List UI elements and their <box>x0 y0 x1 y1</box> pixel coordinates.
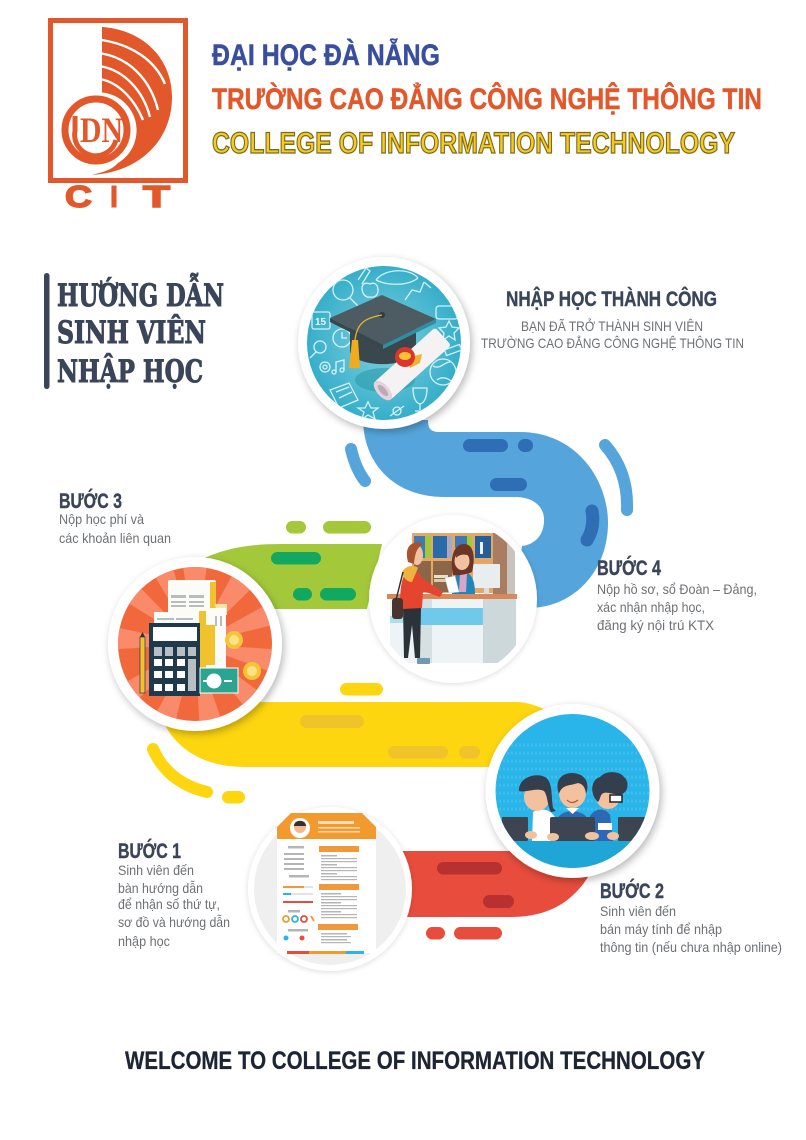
logo: CIT <box>50 20 186 214</box>
text: admission complete: BẠN ĐÃ TRỞ THÀNH SINH VIÊN <box>521 317 703 334</box>
path band: green <box>200 521 382 609</box>
text: step 3 <box>59 489 171 546</box>
university name: ĐẠI HỌC ĐÀ NẴNG <box>212 37 440 72</box>
text: admission complete: TRƯỜNG CAO ĐẲNG CÔNG NGHỆ THÔNG TIN <box>481 334 744 351</box>
text: step 1: sơ đồ và hướng dẫn <box>118 914 230 930</box>
path band: yellow <box>153 683 550 804</box>
text: step 3: các khoản liên quan <box>59 530 171 546</box>
text: step 1: BƯỚC 1 <box>118 839 181 863</box>
illustration: fee calculator circle <box>105 557 285 735</box>
text: step 4: xác nhận nhập học, <box>597 599 705 615</box>
text: admission complete <box>481 287 744 351</box>
illustration: graduation circle <box>298 257 470 429</box>
illustration: students at computers circle <box>486 704 660 878</box>
text: step 3: Nộp học phí và <box>59 511 144 527</box>
text: step 4 <box>597 556 757 633</box>
heading: guide for students: HƯỚNG DẪN <box>57 272 224 314</box>
illustration: registration desk circle <box>369 515 537 683</box>
text: step 4: Nộp hồ sơ, sổ Đoàn – Đảng, <box>597 581 757 597</box>
text: step 4: BƯỚC 4 <box>597 556 661 580</box>
text: step 3: BƯỚC 3 <box>59 489 122 513</box>
text: step 1: bàn hướng dẫn <box>118 880 203 896</box>
illustration: graduation circle: 15 <box>315 317 327 328</box>
path band: red <box>395 851 588 940</box>
logo: CIT: C <box>65 179 92 214</box>
text: step 1: nhập học <box>118 933 170 949</box>
text: step 2: bán máy tính để nhập <box>600 921 722 937</box>
heading: guide for students: SINH VIÊN <box>57 313 206 351</box>
text: step 4: đăng ký nội trú KTX <box>597 617 715 633</box>
text: step 2: Sinh viên đến <box>600 903 676 919</box>
logo: CIT: I <box>110 179 118 214</box>
text: step 2: BƯỚC 2 <box>600 879 664 903</box>
text: step 1: Sinh viên đến <box>118 862 194 878</box>
logo: CIT: T <box>143 179 170 214</box>
text: step 1: để nhận số thứ tự, <box>118 896 220 912</box>
text: step 2: thông tin (nếu chưa nhập online) <box>600 939 782 955</box>
text: admission complete: NHẬP HỌC THÀNH CÔNG <box>506 287 717 311</box>
text: step 2 <box>600 879 782 955</box>
logo: CIT: DN <box>80 110 123 150</box>
illustration: CV circle <box>248 807 412 971</box>
heading: guide for students: NHẬP HỌC <box>57 352 203 390</box>
heading: guide for students <box>44 272 224 390</box>
path band: blue <box>351 420 627 608</box>
text: step 1 <box>118 839 230 949</box>
